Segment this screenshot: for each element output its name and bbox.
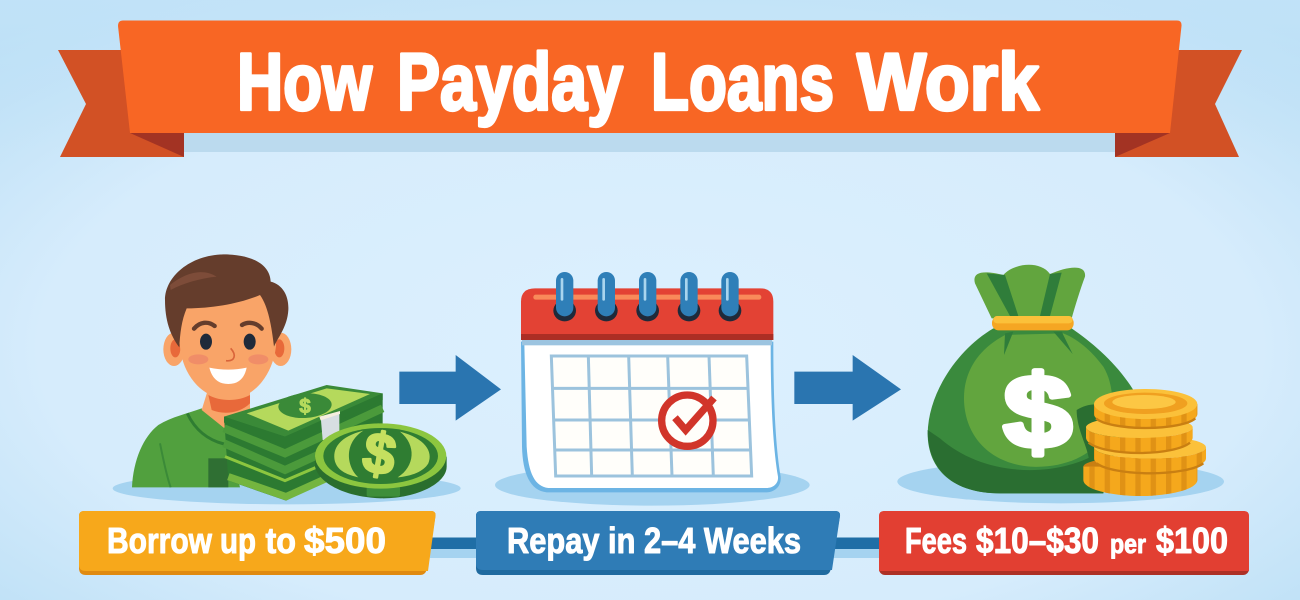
bottom coin (1083, 457, 1197, 496)
label: fees $10-$30 per $100: per (1110, 529, 1146, 559)
coin: $ (358, 420, 401, 489)
label: borrow up to $500: up (220, 520, 256, 561)
step 3 illustration: money bag and coins (897, 265, 1224, 503)
money bag: $ (1003, 353, 1072, 469)
calendar header (521, 288, 773, 340)
label: repay in 2-4 weeks: Repay in 2–4 Weeks (507, 520, 801, 561)
label: fees $10-$30 per $100 (879, 511, 1249, 575)
title text: How (237, 38, 373, 128)
label: repay in 2-4 weeks (476, 511, 840, 575)
calendar grid (551, 356, 752, 476)
title banner (58, 20, 1242, 157)
title text: Loans (651, 38, 834, 128)
label: borrow up to $500 (79, 511, 436, 575)
cash stack: $ (299, 395, 311, 418)
money bag (928, 265, 1133, 493)
label: borrow up to $500: to (266, 520, 296, 561)
second coin (1086, 417, 1193, 453)
step 1 illustration: person with cash (113, 254, 461, 504)
step 2 illustration: calendar (495, 272, 810, 506)
top coin (1094, 389, 1197, 429)
label: fees $10-$30 per $100: $100 (1156, 520, 1228, 561)
calendar rings (553, 272, 741, 321)
label: fees $10-$30 per $100: $10–$30 (976, 520, 1099, 561)
connector between labels 1 and 2 (430, 538, 480, 558)
title text: Work (857, 38, 1040, 128)
title text: Payday (397, 38, 623, 128)
third coin (1094, 436, 1206, 473)
label: fees $10-$30 per $100: Fees (905, 520, 967, 561)
arrow 1 (399, 355, 501, 421)
red check mark (662, 395, 714, 446)
label: borrow up to $500: $500 (304, 520, 386, 561)
title text (237, 38, 1040, 128)
connector between labels 2 and 3 (832, 538, 882, 558)
label: borrow up to $500: Borrow (107, 520, 213, 561)
arrows between steps 1 and 2, and 2 and 3 (399, 355, 901, 421)
coin (315, 420, 447, 498)
gold coins (1083, 389, 1206, 496)
cash stack (224, 385, 383, 501)
person (132, 254, 291, 487)
arrow 2 (794, 355, 901, 421)
